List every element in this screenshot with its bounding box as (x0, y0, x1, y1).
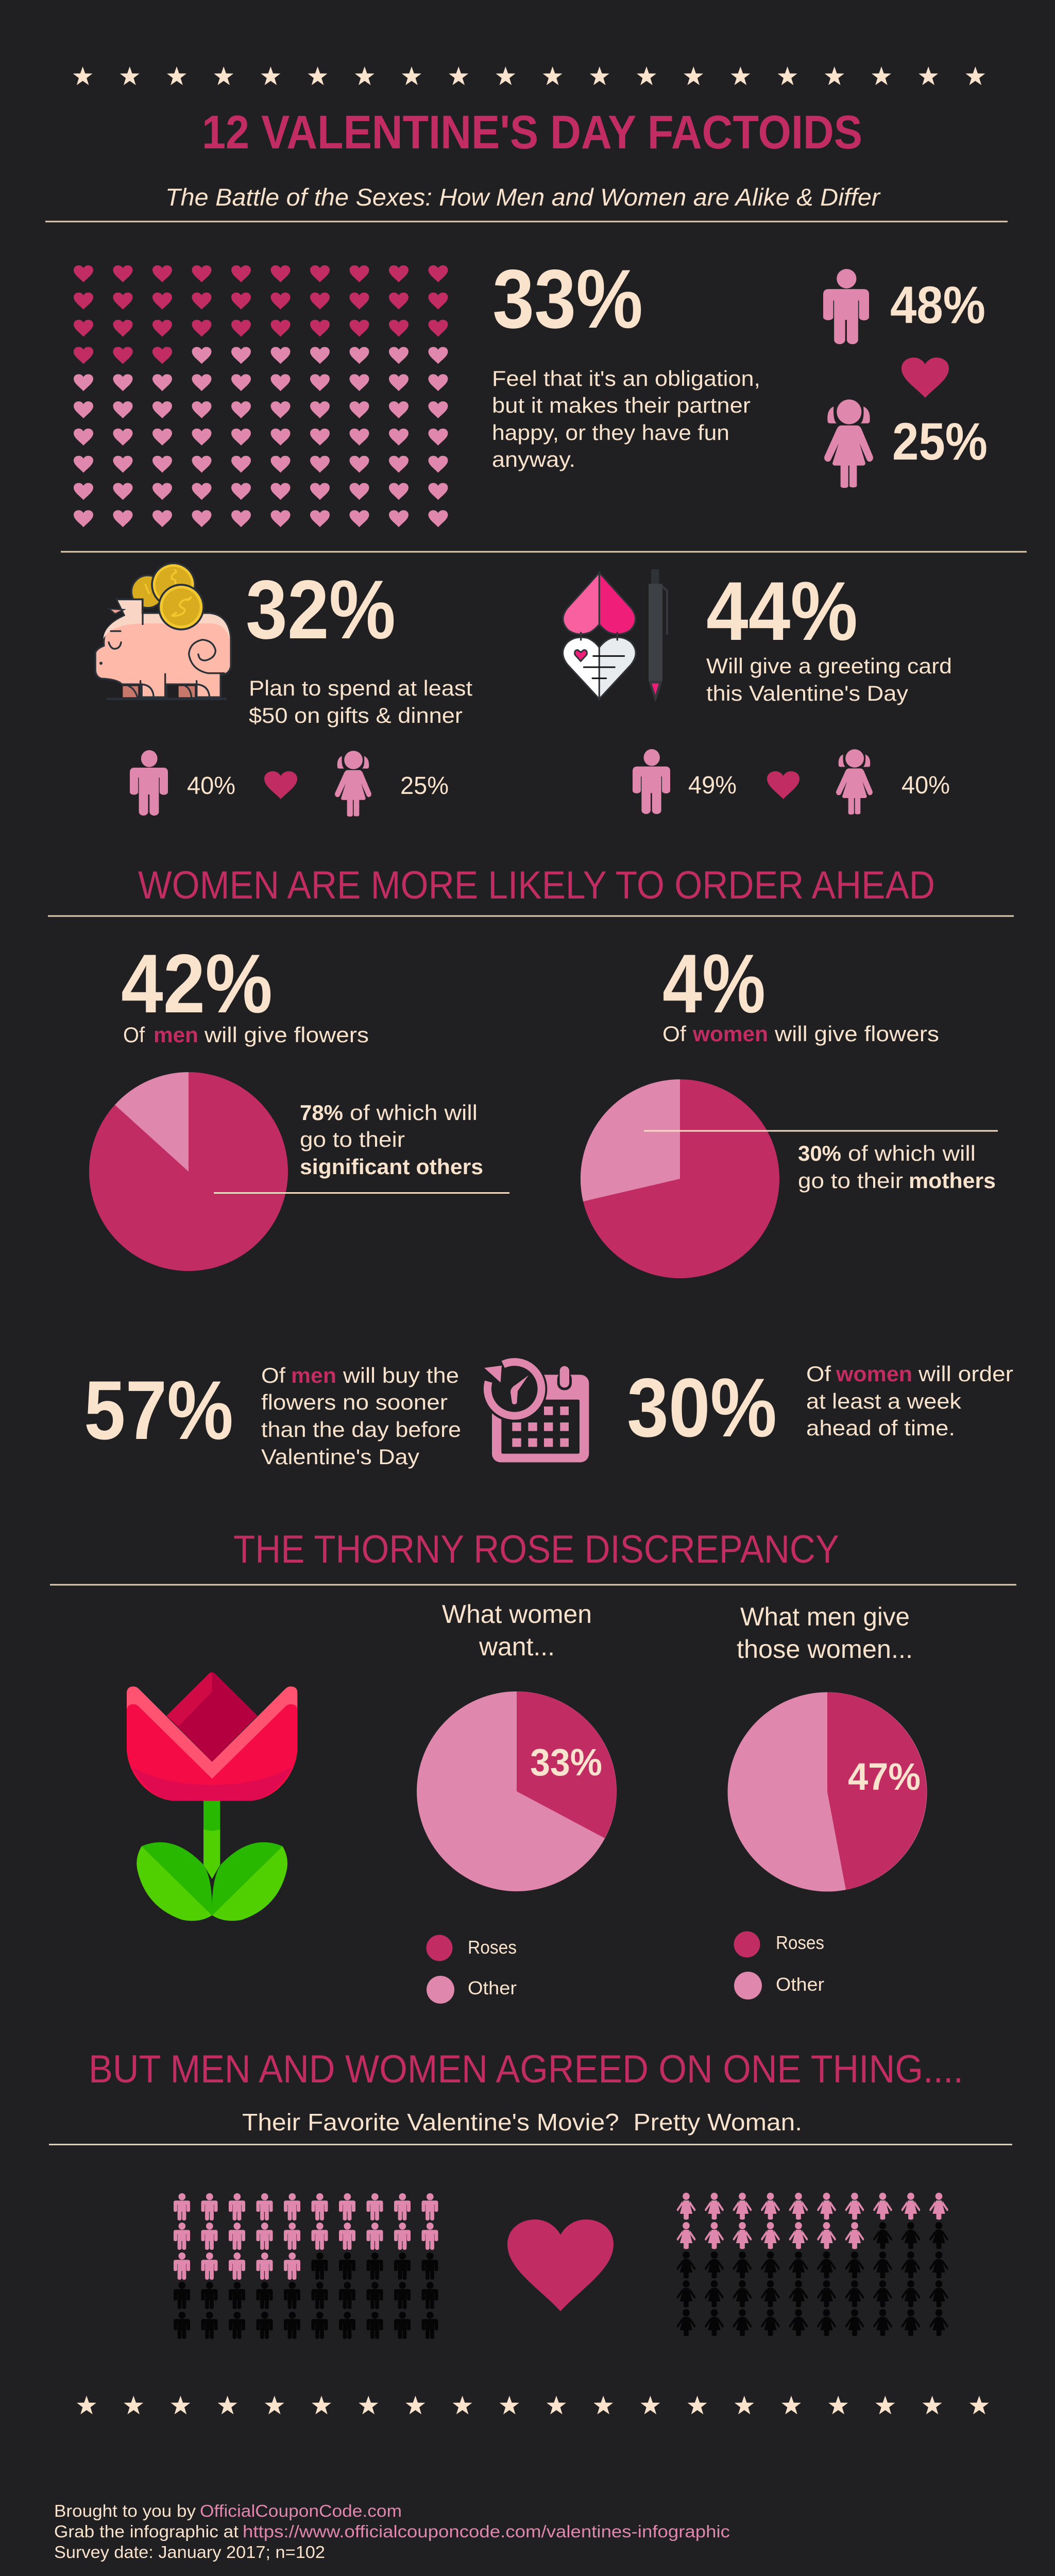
men timing description: men (291, 1363, 336, 1387)
heading: order ahead: WOMEN ARE MORE LIKELY TO ORDER AHEAD (138, 863, 935, 907)
pie heading (737, 1602, 913, 1664)
icon: girl (836, 749, 873, 815)
icon: large heart (507, 2219, 614, 2311)
pie heading: those women... (737, 1635, 913, 1664)
men timing description: flowers no sooner (261, 1390, 448, 1414)
men timing description (261, 1363, 461, 1469)
heading: agreed on one thing: BUT MEN AND WOMEN AGREED ON ONE THING.... (89, 2047, 963, 2091)
pie chart 33% roses (417, 1691, 617, 1891)
panel: timing of flower orders (84, 1356, 1013, 1469)
icon: tulip (127, 1672, 297, 1921)
women timing description: women (836, 1362, 912, 1386)
women 25%: 25% (400, 772, 449, 800)
pie heading: What women (442, 1600, 592, 1629)
pie chart 47% roses: 47% (848, 1755, 921, 1798)
men 48%: 48% (890, 276, 985, 334)
women timing description: will order (918, 1362, 1013, 1386)
women give flowers caption: women (692, 1022, 768, 1046)
header stars (73, 66, 985, 85)
men give flowers caption: will give flowers (204, 1023, 369, 1047)
men give flowers caption (123, 1023, 369, 1047)
greeting card description (706, 654, 952, 705)
big number 4%: 4% (662, 937, 765, 1030)
men timing description: will buy the (343, 1363, 459, 1387)
women give flowers caption: Of (662, 1022, 686, 1046)
men timing description: Valentine's Day (261, 1445, 419, 1469)
footer stars (77, 2396, 989, 2414)
panel: what men give (727, 1602, 927, 1999)
pie annotation: go to their (300, 1127, 405, 1151)
footer credits: Grab the infographic at (54, 2522, 239, 2541)
pie chart 78% (89, 1072, 288, 1271)
women 25%: 25% (892, 412, 988, 471)
footer credits: OfficialCouponCode.com (200, 2501, 402, 2520)
men timing description: than the day before (261, 1417, 461, 1442)
pie annotation (300, 1100, 483, 1179)
icon: heart (901, 358, 949, 398)
men give flowers caption: men (154, 1023, 198, 1047)
women timing description: Of (806, 1362, 831, 1386)
obligation description: happy, or they have fun (492, 420, 729, 445)
obligation description: anyway. (492, 447, 575, 471)
pie heading: want... (479, 1632, 555, 1661)
panel: men give flowers (89, 937, 509, 1271)
heart pictogram 33 of 100 (74, 265, 448, 527)
spending description: $50 on gifts & dinner (249, 703, 463, 727)
women give flowers caption (662, 1022, 939, 1046)
obligation description (492, 366, 760, 471)
women timing description: ahead of time. (806, 1416, 955, 1440)
heading: thorny rose: THE THORNY ROSE DISCREPANCY (233, 1528, 839, 1571)
men timing description: Of (261, 1363, 285, 1387)
panel: women give flowers (581, 937, 998, 1278)
icon: piggy bank with coins (95, 563, 231, 699)
pie heading (442, 1600, 592, 1661)
big number 44%: 44% (706, 565, 858, 658)
legend: Roses (776, 1932, 824, 1953)
women give flowers caption: will give flowers (774, 1022, 939, 1046)
icon: man (633, 749, 670, 814)
panel: obligation stat (74, 252, 988, 527)
big number 33%: 33% (492, 252, 643, 346)
icon: man (823, 269, 869, 344)
legend: Other (776, 1974, 824, 1995)
big number 57%: 57% (84, 1364, 233, 1457)
footer credits: Survey date: January 2017; n=102 (54, 2543, 325, 2562)
icon: girl (824, 399, 873, 488)
legend (427, 1935, 517, 2004)
big number 42%: 42% (121, 937, 273, 1030)
pie annotation: go to their (798, 1168, 903, 1193)
icon: heart (767, 771, 799, 799)
legend (734, 1931, 824, 1999)
spending description (249, 676, 472, 727)
women 40%: 40% (901, 772, 950, 799)
pictogram: men 25 of 50 (174, 2193, 438, 2339)
footer credits (54, 2501, 730, 2562)
men give flowers caption: Of (123, 1023, 145, 1047)
subtitle: The Battle of the Sexes: How Men and Women are Alike & Differ (165, 183, 881, 211)
pie annotation: 30% (798, 1141, 841, 1165)
pie annotation: of which will (848, 1141, 976, 1165)
big number 32%: 32% (246, 563, 396, 656)
panel: what women want (417, 1600, 617, 2004)
pie annotation: 78% (300, 1100, 343, 1125)
icon: man (130, 750, 168, 816)
pie annotation (798, 1141, 996, 1193)
pie annotation: significant others (300, 1155, 483, 1179)
panel: gifts and dinner (95, 563, 472, 817)
footer credits: https://www.officialcouponcode.com/valentines-infographic (243, 2522, 730, 2541)
women timing description: at least a week (806, 1389, 962, 1413)
women timing description (806, 1362, 1013, 1440)
pictogram: women 17 of 50 (677, 2193, 948, 2336)
big number 30%: 30% (627, 1361, 777, 1454)
greeting card description: this Valentine's Day (706, 681, 908, 705)
legend: Other (468, 1977, 517, 1998)
pie heading: What men give (740, 1602, 910, 1631)
icon: girl (335, 751, 371, 817)
panel: greeting card (563, 565, 952, 815)
spending description: Plan to spend at least (249, 676, 472, 700)
legend: Roses (468, 1937, 517, 1958)
pie annotation: mothers (909, 1168, 996, 1193)
pie chart 33% roses: 33% (530, 1741, 602, 1784)
obligation description: but it makes their partner (492, 393, 751, 417)
greeting card description: Will give a greeting card (706, 654, 952, 678)
favorite movie line: Their Favorite Valentine's Movie? Pretty Woman. (242, 2109, 802, 2136)
icon: heart (264, 771, 297, 799)
footer credits: Brought to you by (54, 2501, 196, 2520)
icon: calendar with clock (481, 1356, 589, 1462)
title: 12 VALENTINE'S DAY FACTOIDS (202, 106, 862, 159)
icon: heart card and pen (563, 569, 667, 702)
pie annotation: of which will (350, 1100, 478, 1125)
obligation description: Feel that it's an obligation, (492, 366, 760, 391)
men 49%: 49% (688, 772, 737, 799)
pie chart 30% (581, 1079, 779, 1278)
pie chart 47% roses (727, 1692, 927, 1892)
men 40%: 40% (187, 772, 235, 800)
